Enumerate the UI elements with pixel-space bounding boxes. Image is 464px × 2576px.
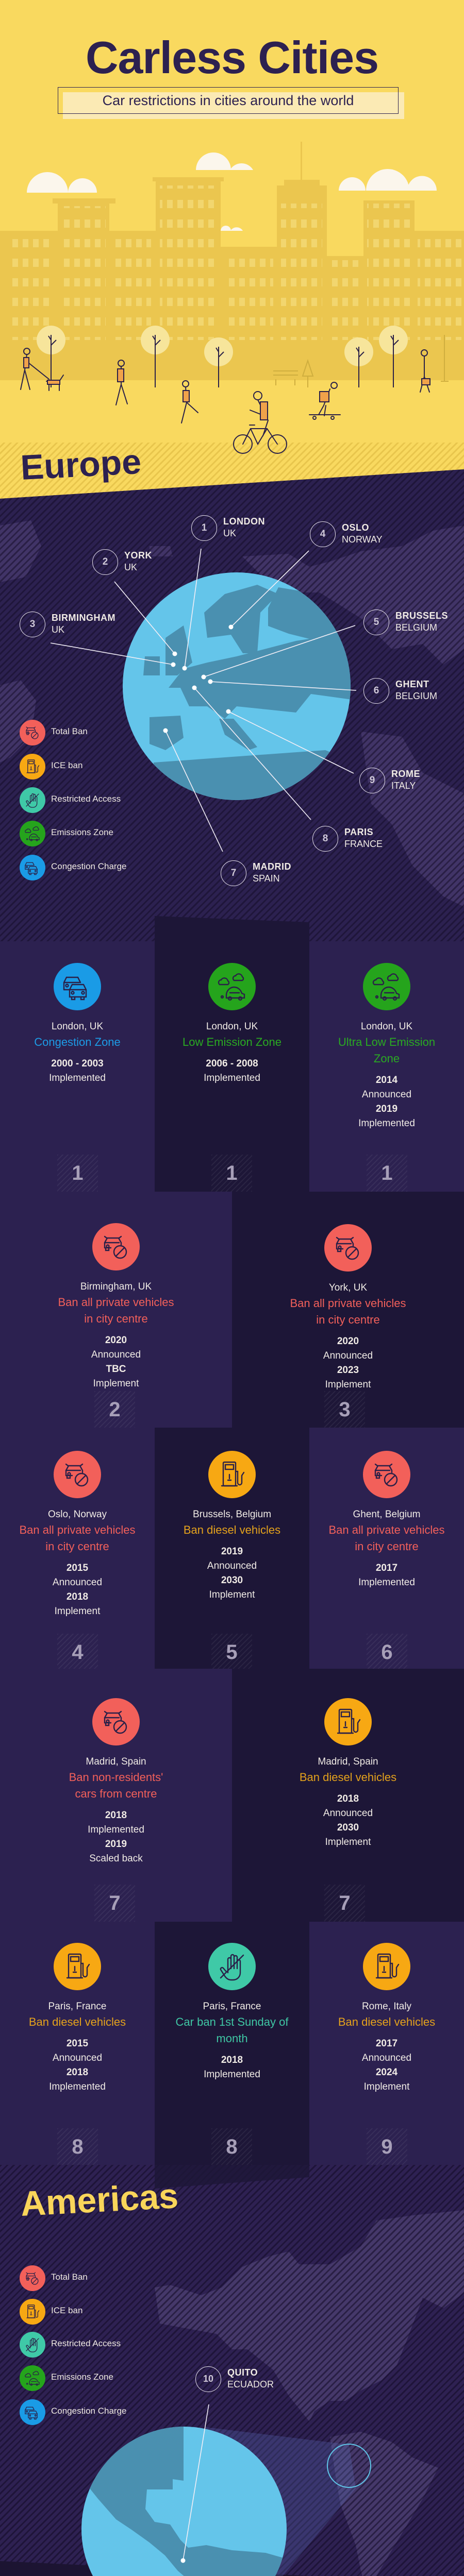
number: 8 [211, 2128, 252, 2165]
card: London ULEZ: London, UK [361, 1021, 412, 1032]
card: Oslo: Oslo, Norway [48, 1509, 107, 1520]
card: Paris sunday ban [176, 1943, 289, 2080]
card: Paris diesel [29, 1943, 126, 2092]
pin: York [92, 549, 152, 575]
card: London ULEZ [338, 963, 435, 1129]
card: London congestion zone: London, UK [52, 1021, 103, 1032]
pin: York: YORK [124, 550, 152, 561]
card: London low emission zone: 2006 - 2008 [206, 1058, 258, 1069]
number: 1 [367, 1155, 407, 1192]
card: Paris diesel: Paris, France [48, 2001, 106, 2012]
card: Madrid non-residents: Madrid, Spain [86, 1756, 146, 1767]
card: Brussels: 2019 [221, 1546, 243, 1557]
pin: Brussels [363, 609, 448, 635]
card: Madrid non-residents: 2019 [105, 1839, 127, 1850]
number: 5: 5 [226, 1641, 238, 1664]
card: York: Announced [323, 1350, 373, 1361]
pin: Quito: ECUADOR [227, 2379, 274, 2389]
globe: europe [51, 548, 357, 852]
number: 8: 8 [226, 2136, 238, 2158]
card: Ghent: in city centre [355, 1540, 419, 1553]
card: Oslo: Implement [55, 1606, 100, 1617]
number: 9: 9 [381, 2136, 393, 2158]
card: Paris sunday ban: month [216, 2032, 248, 2045]
number: 5 [211, 1634, 252, 1671]
card: York: York, UK [329, 1282, 367, 1293]
card: Paris sunday ban: Implemented [204, 2069, 260, 2080]
legend: americas [20, 2265, 126, 2425]
number: 2: 2 [109, 1398, 121, 1421]
legend item: congestion charge [20, 855, 126, 880]
card: London congestion zone: 2000 - 2003 [51, 1058, 104, 1069]
card: Birmingham: in city centre [84, 1312, 148, 1325]
pin: Quito: QUITO [227, 2367, 258, 2378]
legend item: total ban [20, 720, 88, 745]
card: London low emission zone: Low Emission Zone [183, 1036, 281, 1048]
legend item: congestion charge: Congestion Charge [51, 861, 126, 871]
card: London congestion zone [34, 963, 121, 1083]
card: Madrid diesel [300, 1698, 396, 1848]
pin: Birmingham: UK [52, 624, 64, 635]
legend item: ice ban: ICE ban [51, 2306, 82, 2315]
pin: London: 1 [202, 522, 207, 533]
card: Oslo: Announced [53, 1577, 102, 1588]
card: Madrid diesel: Implement [325, 1837, 371, 1848]
card: Rome diesel: 2024 [376, 2067, 397, 2078]
pin: London: UK [223, 528, 236, 538]
row 5 cells [0, 1922, 155, 2165]
number: 9 [367, 2128, 407, 2165]
pin: Rome [359, 768, 420, 793]
legend item: ice ban [20, 754, 82, 779]
card: Oslo [19, 1451, 135, 1617]
globe: americas [81, 2404, 371, 2576]
card: Madrid diesel: Madrid, Spain [318, 1756, 378, 1767]
legend item: congestion charge [20, 2399, 126, 2425]
legend item: total ban: Total Ban [51, 726, 88, 736]
card: Paris sunday ban: 2018 [221, 2055, 243, 2065]
legend item: restricted access: Restricted Access [51, 794, 121, 804]
row 3 cells [0, 1428, 155, 1669]
card: Madrid non-residents: Implemented [88, 1824, 144, 1835]
legend item: emissions zone: Emissions Zone [51, 827, 113, 837]
number: 3: 3 [339, 1398, 351, 1421]
card: Brussels: 2030 [221, 1575, 243, 1586]
pin: Birmingham [20, 612, 115, 637]
heading: Europe: Europe [20, 442, 142, 487]
legend item: emissions zone [20, 2365, 113, 2391]
legend item: emissions zone: Emissions Zone [51, 2372, 113, 2382]
pin: Quito [195, 2366, 274, 2392]
card: Rome diesel: 2017 [376, 2038, 397, 2049]
pin: Rome: ITALY [391, 781, 416, 791]
card: Birmingham: Birmingham, UK [80, 1281, 152, 1292]
pin: Madrid: 7 [231, 868, 236, 878]
legend item: congestion charge: Congestion Charge [51, 2406, 126, 2416]
card: Brussels: Ban diesel vehicles [184, 1523, 280, 1536]
legend item: restricted access: Restricted Access [51, 2338, 121, 2348]
pin: Birmingham: 3 [30, 619, 35, 630]
card: Paris diesel: Ban diesel vehicles [29, 2015, 126, 2028]
card: Oslo: 2018 [67, 1591, 88, 1602]
card: Rome diesel: Rome, Italy [362, 2001, 411, 2012]
pin: Ghent [363, 678, 437, 704]
card: Birmingham: 2020 [105, 1335, 127, 1346]
card: Oslo: in city centre [45, 1540, 109, 1553]
pin: Oslo: NORWAY [342, 534, 383, 545]
card: Paris sunday ban: Car ban 1st Sunday of [176, 2015, 288, 2028]
subtitle box [58, 87, 404, 119]
card: Paris diesel: 2015 [67, 2038, 88, 2049]
number: 1: 1 [381, 1162, 393, 1184]
pin: Rome: 9 [370, 775, 375, 786]
legend item: emissions zone [20, 821, 113, 846]
legend: europe [20, 720, 126, 880]
number: 6 [367, 1634, 407, 1671]
card: Birmingham: TBC [106, 1364, 126, 1375]
card: Madrid non-residents: Ban non-residents' [69, 1771, 163, 1784]
card: Paris diesel: Announced [53, 2053, 102, 2063]
number: 4: 4 [72, 1641, 84, 1664]
pin: Madrid: SPAIN [253, 873, 280, 884]
row 4 cells [0, 1669, 232, 1922]
number: 7 [324, 1885, 365, 1922]
pin: York: 2 [103, 556, 108, 567]
legend item: total ban [20, 2265, 88, 2291]
card: Rome diesel: Announced [362, 2053, 411, 2063]
card: London congestion zone: Congestion Zone [34, 1036, 121, 1048]
card: Madrid diesel: Announced [323, 1808, 373, 1819]
pin: Paris: 8 [323, 833, 328, 844]
row 1 cells [0, 941, 155, 1192]
legend item: total ban: Total Ban [51, 2272, 88, 2282]
card: Ghent: 2017 [376, 1563, 397, 1573]
pin: Ghent: BELGIUM [395, 691, 437, 701]
card: Paris diesel: 2018 [67, 2067, 88, 2078]
title: Carless Cities [86, 32, 378, 83]
subtitle box: Car restrictions in cities around the world [103, 93, 354, 108]
card: York: 2020 [337, 1336, 359, 1347]
card: Oslo: Ban all private vehicles [19, 1523, 135, 1536]
header: yellow city scene [0, 0, 464, 499]
pin: Brussels: 5 [374, 617, 379, 628]
legend item: ice ban: ICE ban [51, 760, 82, 770]
pin: Ghent: 6 [374, 685, 379, 696]
pin: Brussels: BELGIUM [395, 622, 437, 633]
card: Ghent: Implemented [358, 1577, 415, 1588]
card: Oslo: 2015 [67, 1563, 88, 1573]
pin: Paris: PARIS [344, 827, 373, 837]
card: Brussels: Implement [209, 1589, 255, 1600]
card: York: in city centre [316, 1313, 380, 1326]
heading: Americas: Americas [20, 2176, 179, 2224]
number: 7: 7 [109, 1892, 121, 1914]
card: York: Ban all private vehicles [290, 1297, 406, 1310]
card: Birmingham: Ban all private vehicles [58, 1296, 174, 1309]
pin: Madrid: MADRID [253, 861, 291, 872]
card: York [290, 1224, 406, 1390]
panel: dark slant continuation [155, 2165, 309, 2189]
card: London low emission zone [183, 963, 281, 1083]
number: 7 [94, 1885, 135, 1922]
pin: Brussels: BRUSSELS [395, 611, 448, 621]
card: Madrid non-residents [69, 1698, 163, 1864]
card: Rome diesel: Implement [364, 2081, 409, 2092]
card: Madrid diesel: Ban diesel vehicles [300, 1771, 396, 1784]
number: 8: 8 [72, 2136, 84, 2158]
card: London ULEZ: Implemented [358, 1118, 415, 1129]
pin: Quito: 10 [203, 2374, 213, 2384]
card: Rome diesel [338, 1943, 435, 2092]
card: London ULEZ: 2019 [376, 1104, 397, 1114]
number: 6: 6 [381, 1641, 393, 1664]
pin: Madrid [221, 860, 291, 886]
card: Rome diesel: Ban diesel vehicles [338, 2015, 435, 2028]
number: 1: 1 [226, 1162, 238, 1184]
card: Madrid non-residents: Scaled back [89, 1853, 143, 1864]
legend item: ice ban [20, 2299, 82, 2325]
pin: Rome: ROME [391, 769, 420, 779]
pin: Paris [312, 826, 383, 852]
number: 8 [57, 2128, 98, 2165]
pin: Ghent: GHENT [395, 679, 429, 689]
card: York: 2023 [337, 1365, 359, 1376]
number: 4 [57, 1634, 98, 1671]
panel: europe map section [0, 469, 464, 907]
card: Brussels [184, 1451, 280, 1600]
pin: Oslo: 4 [320, 529, 325, 539]
pin: Birmingham: BIRMINGHAM [52, 613, 115, 623]
number: 7: 7 [339, 1892, 351, 1914]
card: London ULEZ: Announced [362, 1089, 411, 1100]
number: 1: 1 [72, 1162, 84, 1184]
pin: London: LONDON [223, 516, 265, 527]
number: 2 [94, 1391, 135, 1428]
pin: Oslo: OSLO [342, 522, 369, 533]
card: York: Implement [325, 1379, 371, 1390]
panel: americas section background [0, 2165, 464, 2576]
card: Paris diesel: Implemented [49, 2081, 106, 2092]
pin: London [191, 515, 265, 541]
legend item: restricted access [20, 787, 121, 813]
card: Birmingham: Announced [91, 1349, 141, 1360]
card: London low emission zone: London, UK [206, 1021, 258, 1032]
card: Brussels: Announced [207, 1561, 257, 1571]
card: Madrid non-residents: cars from centre [75, 1787, 157, 1800]
pin: Oslo [310, 521, 383, 547]
card: London congestion zone: Implemented [49, 1073, 106, 1083]
card: Ghent [328, 1451, 444, 1588]
pin: Paris: FRANCE [344, 839, 383, 849]
pin: York: UK [124, 562, 137, 572]
card: Madrid diesel: 2018 [337, 1793, 359, 1804]
card: Ghent: Ban all private vehicles [328, 1523, 444, 1536]
card: Birmingham [58, 1223, 174, 1389]
card: London ULEZ: 2014 [376, 1075, 397, 1086]
panel: transition dark slant top row1 [155, 916, 309, 942]
card: Birmingham: Implement [93, 1378, 139, 1389]
card: Paris sunday ban: Paris, France [203, 2001, 261, 2012]
card: London ULEZ: Zone [374, 1052, 400, 1065]
footer info panel dark [0, 2561, 310, 2576]
number: 1 [57, 1155, 98, 1192]
card: London low emission zone: Implemented [204, 1073, 260, 1083]
row 2 cells [0, 1192, 232, 1428]
card: London ULEZ: Ultra Low Emission [338, 1036, 435, 1048]
number: 3 [324, 1391, 365, 1428]
card: Madrid diesel: 2030 [337, 1822, 359, 1833]
card: Brussels: Brussels, Belgium [193, 1509, 271, 1520]
card: Ghent: Ghent, Belgium [353, 1509, 420, 1520]
number: 1 [211, 1155, 252, 1192]
legend item: restricted access [20, 2332, 121, 2358]
card: Madrid non-residents: 2018 [105, 1810, 127, 1821]
